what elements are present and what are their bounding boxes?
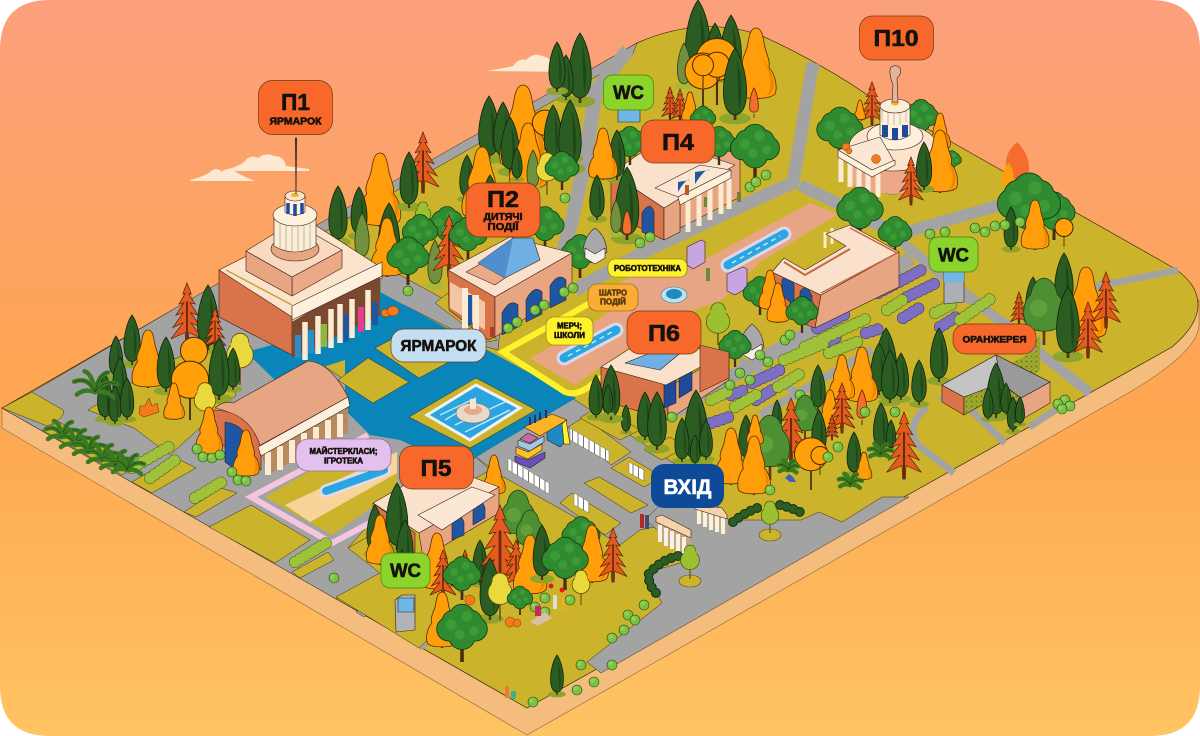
- label: P10: [860, 16, 934, 60]
- building: pavilion P6: [601, 342, 729, 420]
- label: P5: [400, 446, 474, 489]
- label: events tent: [588, 284, 638, 311]
- label: P2: [466, 183, 540, 237]
- label: merch and schools: МЕРЧ;: [557, 320, 582, 330]
- building: pavilion P4: [611, 125, 741, 240]
- palms row: [46, 421, 144, 474]
- building: pavilion P10 with statue: [838, 66, 937, 197]
- label: P1: П1: [281, 89, 310, 115]
- label: workshops and game library: ІГРОТЕКА: [324, 456, 363, 466]
- blue plaza: [246, 292, 576, 470]
- label: P6: [627, 311, 701, 354]
- white fences: [508, 428, 644, 513]
- pink path with sandy lawn and fountain: [251, 435, 397, 543]
- gazebos: [583, 228, 764, 360]
- trees in front of P10: [899, 130, 958, 205]
- trees and bushes in front of the hall: [192, 407, 259, 486]
- label: robotics: [608, 259, 687, 277]
- building: arched hall: [212, 361, 350, 478]
- trees: in front of the unnamed pavilion: [706, 270, 818, 400]
- people at entrance: [640, 514, 649, 529]
- book arch installation: [515, 410, 570, 468]
- label: events tent: ШАТРО: [599, 288, 627, 298]
- label: WC south: WC: [390, 561, 421, 582]
- trees behind P5: [483, 455, 544, 555]
- trees behind P10: [817, 82, 961, 172]
- building: pavilion P5: [373, 465, 499, 558]
- label: P4: П4: [662, 129, 694, 155]
- garden hedges: lavender and green: [132, 268, 993, 562]
- label: merch and schools: ШКОЛИ: [554, 330, 585, 340]
- trees around P4: [587, 87, 779, 248]
- label: workshops and game library: [296, 439, 391, 471]
- label: orangery: [953, 324, 1036, 354]
- entrance colonnades: [656, 504, 727, 556]
- label: WC north: WC: [613, 83, 644, 104]
- label: robotics: РОБОТОТЕХНІКА: [614, 264, 681, 273]
- label: entrance: ВХІД: [664, 476, 712, 499]
- label: P2: ПОДІЇ: [488, 220, 520, 233]
- label: P6: П6: [648, 320, 680, 346]
- figures on the promenade: [704, 197, 710, 281]
- trees: west cluster left of P1: [74, 283, 253, 426]
- label: entrance: [651, 464, 724, 508]
- pumpkins near P1: [381, 306, 399, 317]
- central and southern tree belt: [587, 328, 951, 495]
- trees: upper-right group with flames: [837, 142, 1075, 255]
- label: P4: [641, 120, 715, 163]
- label: P2: ДИТЯЧІ: [484, 211, 523, 223]
- label: WC east: WC: [938, 246, 969, 266]
- label: events tent: ПОДІЙ: [600, 298, 626, 306]
- building: pavilion P1: [219, 138, 382, 360]
- building: unnamed pavilion with L-shaped roof: [772, 225, 899, 328]
- base: side strip of the platform: [2, 300, 1199, 735]
- label: P1: [258, 80, 332, 134]
- peach promenade with yellow border and long fountains: [503, 203, 838, 393]
- label: merch and schools: [546, 317, 593, 345]
- label: WC east: [929, 237, 978, 272]
- lawn blocks: [2, 293, 686, 648]
- label: P5: П5: [420, 455, 452, 481]
- square fountain: [427, 385, 520, 440]
- building: pavilion P2: [448, 237, 578, 340]
- clouds: [190, 55, 1060, 269]
- label: P1: ЯРМАРОК: [270, 116, 322, 128]
- people: picnic and balloons: [530, 584, 565, 626]
- building: orangery: [942, 335, 1050, 420]
- people: bottom corner visitors: [505, 686, 516, 699]
- label: workshops and game library: МАЙСТЕРКЛАСИ;: [310, 447, 378, 456]
- label: WC south: [381, 553, 430, 588]
- entrance hedges and small trees: [648, 501, 802, 596]
- label: P2: П2: [487, 186, 519, 212]
- label: orangery: ОРАНЖЕРЕЯ: [962, 334, 1027, 346]
- WC kiosks: [395, 108, 964, 632]
- trees around P5 and south lawn: [329, 483, 649, 707]
- label: P10: П10: [874, 25, 918, 51]
- trees: around orangery and right edge: [981, 253, 1121, 434]
- label: WC north: [604, 75, 654, 110]
- label: fair plaza: ЯРМАРОК: [400, 338, 477, 355]
- label: fair plaza: [391, 329, 486, 362]
- trees: top and back groves: [325, 0, 776, 296]
- lilac book blocks: [687, 240, 747, 295]
